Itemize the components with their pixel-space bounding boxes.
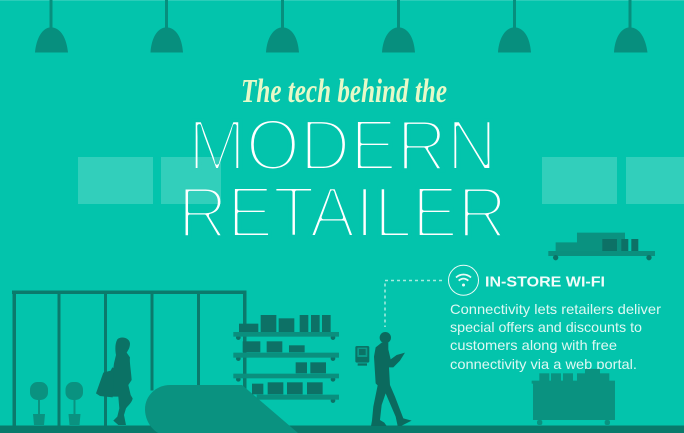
callout body text <box>450 301 661 372</box>
potted plants <box>30 382 83 425</box>
man using smartphone <box>371 332 412 426</box>
callout leader line <box>385 280 442 327</box>
callout heading: IN-STORE WI-FI <box>485 274 605 290</box>
escalator <box>145 385 298 433</box>
background windows <box>78 157 684 204</box>
title: MODERN RETAILER: RETAILER <box>178 173 507 253</box>
callout body text: connectivity via a web portal. <box>450 356 637 372</box>
ceiling lamps <box>35 0 648 52</box>
shopper woman with bag <box>96 338 133 425</box>
display table <box>532 369 615 425</box>
floor <box>0 426 684 433</box>
icon: wi-fi <box>448 265 478 295</box>
glass storefront frame <box>12 290 246 426</box>
title: MODERN RETAILER <box>178 106 507 253</box>
title: MODERN RETAILER: MODERN <box>188 106 497 186</box>
title: The tech behind the: The tech behind the <box>241 73 447 110</box>
wall payment terminal <box>355 346 369 366</box>
callout body text: customers along with free <box>450 337 617 353</box>
upper right display shelf <box>548 233 655 260</box>
product shelves <box>233 315 339 403</box>
callout body text: Connectivity lets retailers deliver <box>450 301 661 317</box>
callout body text: special offers and discounts to <box>450 319 642 335</box>
